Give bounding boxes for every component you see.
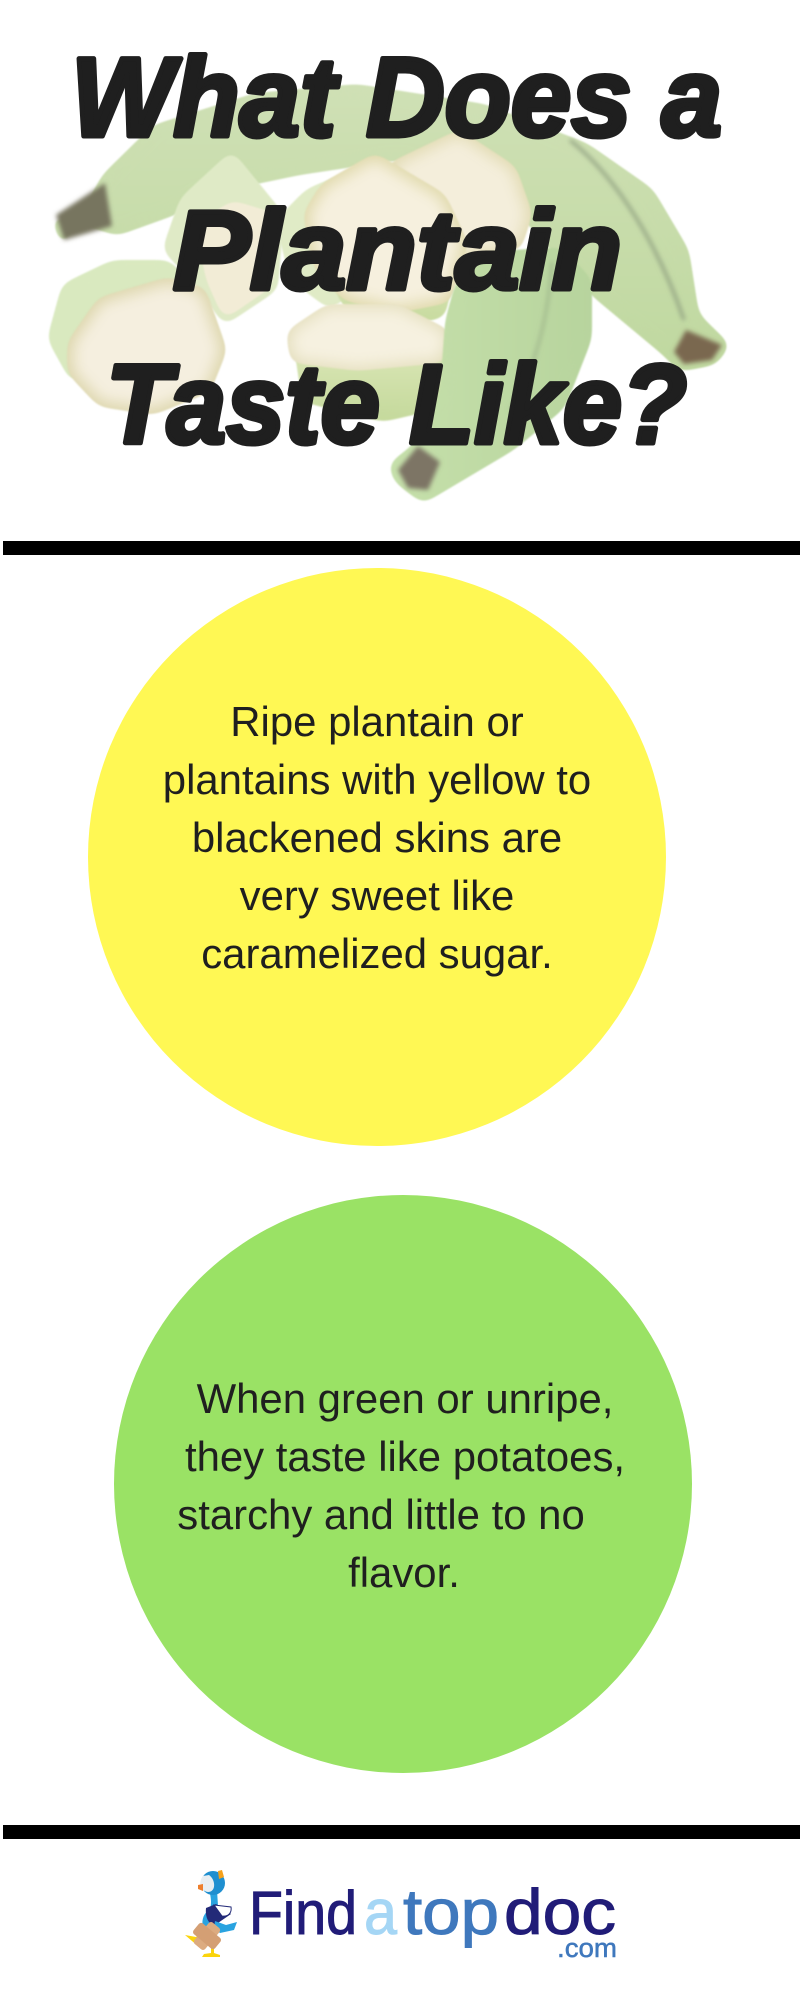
ripe plantain text [163, 698, 591, 977]
wordmark: doc [504, 1876, 616, 1948]
front leg [202, 1944, 220, 1957]
title: What Does a [71, 35, 722, 160]
wordmark: Find [249, 1879, 357, 1947]
big curved plantain [50, 84, 731, 372]
plantain photo background [47, 84, 731, 504]
yellow circle [88, 568, 666, 1146]
icon: duck mascot [185, 1870, 237, 1957]
top divider bar [3, 541, 800, 555]
logo: Findatopdoc [185, 1870, 617, 1963]
rear slice [388, 132, 530, 256]
head [201, 1871, 225, 1895]
ripe plantain text: caramelized sugar. [201, 930, 553, 977]
front small plantain [388, 247, 592, 504]
wordmark [249, 1876, 617, 1963]
green circle [114, 1195, 692, 1773]
panel: ripe plantain [88, 568, 666, 1146]
unripe plantain text: flavor. [348, 1549, 460, 1596]
unripe plantain text: they taste like potatoes, [185, 1433, 625, 1480]
bottom slice [288, 306, 449, 422]
ripe plantain text: very sweet like [240, 872, 514, 919]
rear green piece [275, 168, 370, 310]
wordmark: top [403, 1876, 499, 1948]
bandage [193, 1921, 221, 1951]
panel: unripe plantain [114, 1195, 692, 1773]
ripe plantain text: blackened skins are [192, 814, 562, 861]
wordmark: .com [557, 1933, 617, 1963]
wedge slice [162, 150, 284, 326]
title: Plantain [173, 188, 622, 313]
bottom divider bar [3, 1825, 800, 1839]
left slice [47, 260, 224, 412]
ripe plantain text: plantains with yellow to [163, 756, 591, 803]
centre slice [306, 156, 465, 326]
unripe plantain text [177, 1375, 625, 1596]
wordmark: a [364, 1876, 397, 1948]
unripe plantain text: starchy and little to no [177, 1491, 585, 1538]
right stem tip [674, 330, 722, 364]
left stem [56, 183, 112, 240]
unripe plantain text: When green or unripe, [197, 1375, 613, 1422]
back leg [185, 1933, 201, 1947]
title [71, 35, 722, 467]
title: Taste Like? [106, 342, 687, 467]
ripe plantain text: Ripe plantain or [230, 698, 524, 745]
body and neck [202, 1890, 218, 1928]
